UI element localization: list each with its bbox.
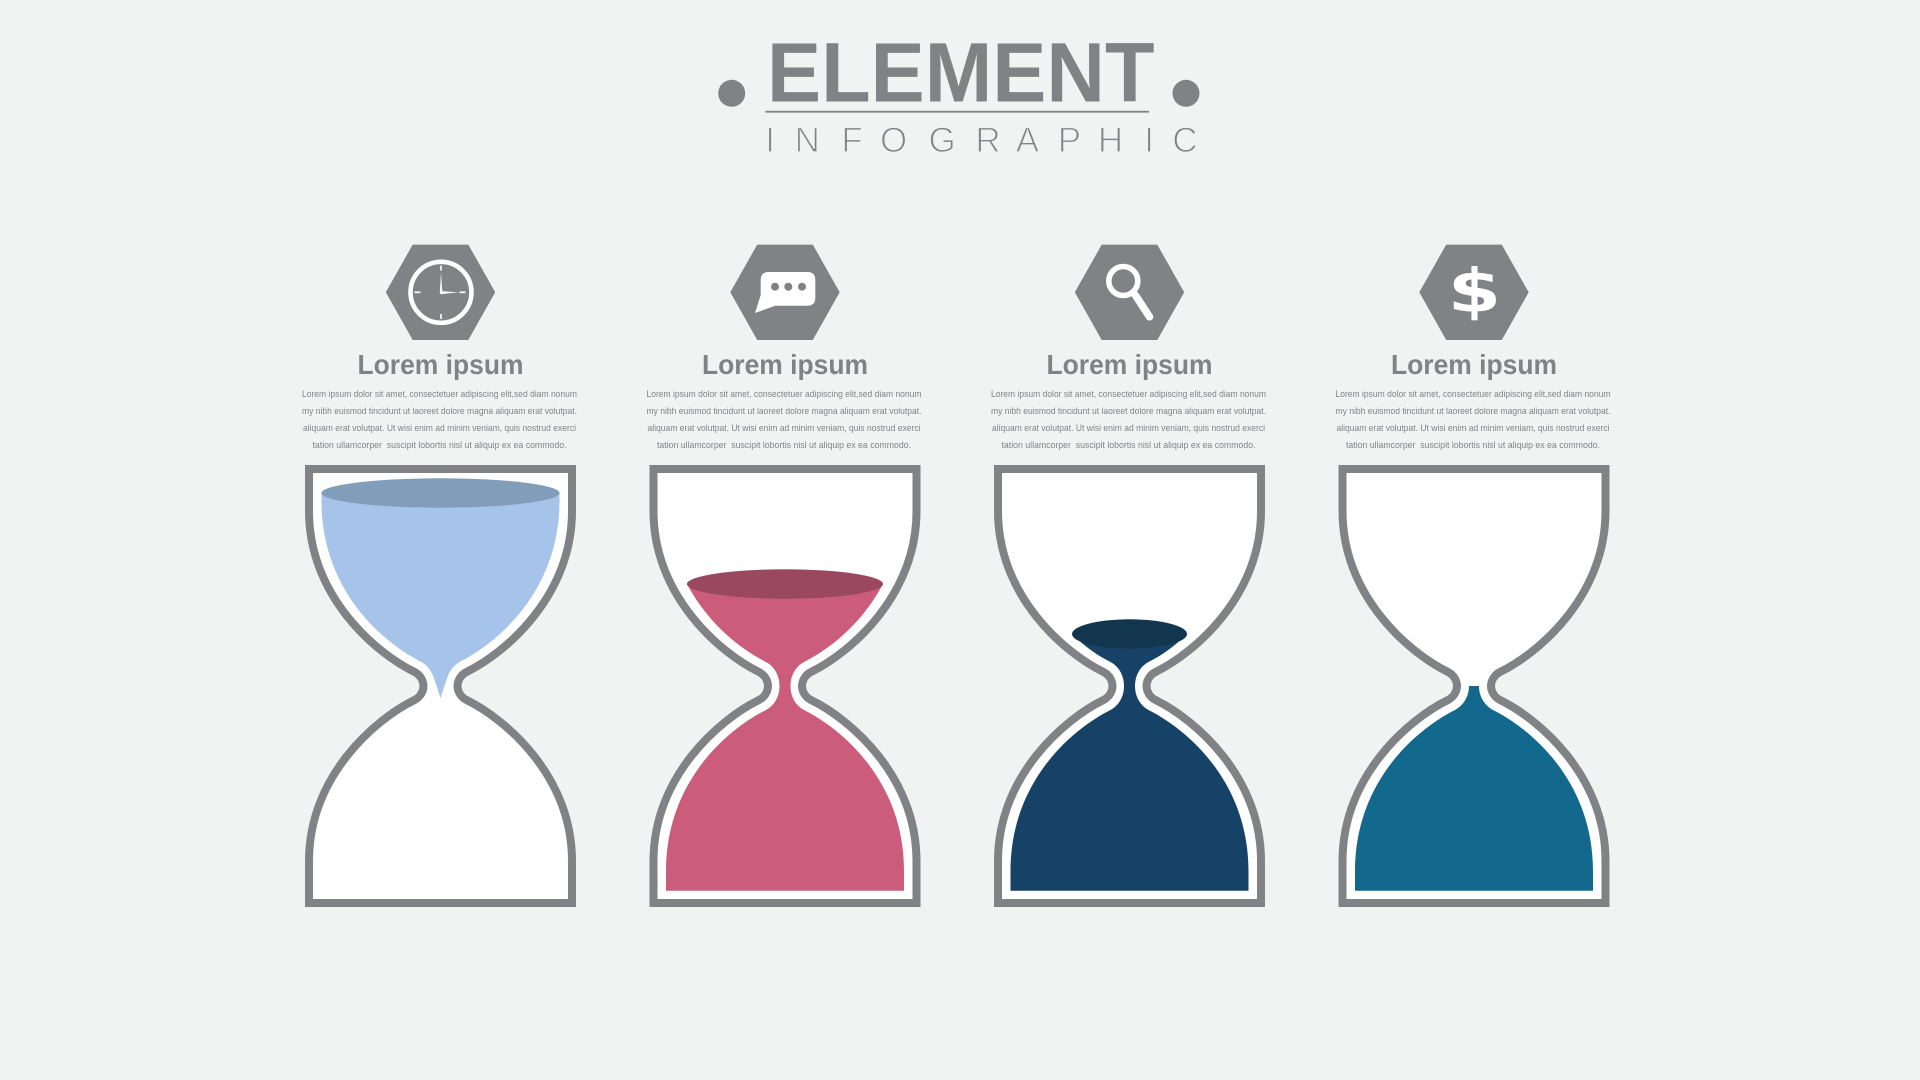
- text block: tation ullamcorper suscipit lobortis nisl ut aliquip ex ea commodo.: [1346, 439, 1600, 450]
- text block: tation ullamcorper suscipit lobortis nisl ut aliquip ex ea commodo.: [657, 439, 911, 450]
- text block: [1336, 388, 1611, 450]
- icon: dollar hexagon: $: [1448, 256, 1501, 326]
- subheading: INFOGRAPHIC: INFOGRAPHIC: [765, 121, 1197, 160]
- column 2: chat: [646, 245, 922, 903]
- heading: Lorem ipsum: [358, 349, 524, 380]
- heading: Lorem ipsum: [1391, 349, 1557, 380]
- icon: clock hexagon: [386, 245, 495, 340]
- text block: my nibh euismod tincidunt ut laoreet dolore magna aliquam erat volutpat.: [1336, 405, 1610, 416]
- text block: tation ullamcorper suscipit lobortis nisl ut aliquip ex ea commodo.: [312, 439, 566, 450]
- hourglass: pink, half full: [654, 469, 916, 903]
- text block: Lorem ipsum dolor sit amet, consectetuer adipiscing elit,sed diam nonum: [646, 388, 922, 399]
- heading: ELEMENT: ELEMENT: [767, 25, 1154, 120]
- heading: Lorem ipsum: [702, 349, 868, 380]
- hourglass: teal, bottom full: [1342, 469, 1606, 903]
- icon: chat hexagon: [730, 245, 840, 340]
- text block: [302, 388, 577, 450]
- title underline: [765, 111, 1149, 113]
- hourglass: navy, nearly empty top: [998, 469, 1261, 903]
- text block: my nibh euismod tincidunt ut laoreet dolore magna aliquam erat volutpat.: [991, 405, 1266, 416]
- heading: Lorem ipsum: [1046, 349, 1212, 380]
- text block: aliquam erat volutpat. Ut wisi enim ad minim veniam, quis nostrud exerci: [648, 422, 920, 433]
- column 1: clock: [302, 245, 577, 903]
- text block: aliquam erat volutpat. Ut wisi enim ad minim veniam, quis nostrud exerci: [992, 422, 1265, 433]
- text block: my nibh euismod tincidunt ut laoreet dolore magna aliquam erat volutpat.: [646, 405, 922, 416]
- text block: Lorem ipsum dolor sit amet, consectetuer adipiscing elit,sed diam nonum: [1336, 388, 1611, 399]
- text block: aliquam erat volutpat. Ut wisi enim ad minim veniam, quis nostrud exerci: [1336, 422, 1610, 433]
- text block: aliquam erat volutpat. Ut wisi enim ad minim veniam, quis nostrud exerci: [303, 422, 576, 433]
- title dot right: [1172, 80, 1200, 107]
- text block: Lorem ipsum dolor sit amet, consectetuer adipiscing elit,sed diam nonum: [991, 388, 1266, 399]
- icon: dollar hexagon: [1419, 245, 1529, 340]
- text block: [991, 388, 1266, 450]
- text block: Lorem ipsum dolor sit amet, consectetuer adipiscing elit,sed diam nonum: [302, 388, 577, 399]
- text block: tation ullamcorper suscipit lobortis nisl ut aliquip ex ea commodo.: [1002, 439, 1256, 450]
- text block: [646, 388, 922, 450]
- title dot left: [718, 80, 745, 107]
- icon: magnifier hexagon: [1075, 245, 1184, 340]
- text block: my nibh euismod tincidunt ut laoreet dolore magna aliquam erat volutpat.: [302, 405, 577, 416]
- column 4: dollar: [1336, 245, 1611, 903]
- column 3: search: [991, 245, 1266, 903]
- hourglass: light blue, nearly full top: [309, 469, 572, 903]
- title: [718, 25, 1200, 160]
